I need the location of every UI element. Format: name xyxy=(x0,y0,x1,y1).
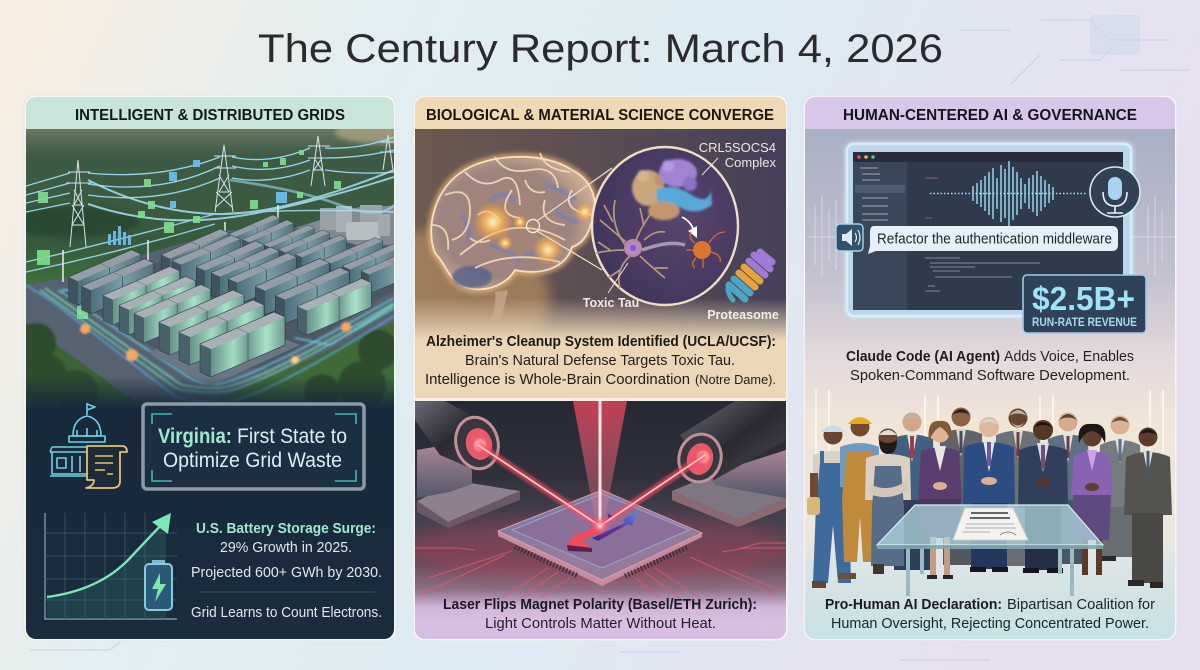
person: worker in overalls xyxy=(807,425,856,588)
header bar: HUMAN-CENTERED AI & GOVERNANCE xyxy=(843,107,1137,124)
right laser head xyxy=(672,401,786,527)
icon: battery xyxy=(145,560,172,610)
panel: intelligent and distributed grids xyxy=(24,94,396,642)
header bar xyxy=(26,97,394,129)
header bar xyxy=(805,97,1175,129)
text: laser flips magnet: Light Controls Matter Without Heat. xyxy=(485,615,716,632)
callout: revenue: $2.5B+ xyxy=(1032,280,1135,317)
labels: molecules: Proteasome xyxy=(707,308,779,322)
laser beams xyxy=(478,401,705,526)
text: Pro-Human AI Declaration: Bipartisan Coalition for xyxy=(1007,596,1155,613)
person: center man in navy suit xyxy=(963,417,1015,572)
person: man in dark navy suit xyxy=(1018,420,1068,573)
panel image: battery site landscape xyxy=(26,129,394,406)
left laser head xyxy=(415,401,520,528)
speech bubble xyxy=(868,226,1118,254)
laser image background xyxy=(410,398,790,640)
text: Claude Code: Claude Code (AI Agent) xyxy=(846,348,1000,365)
person: back row man 1 xyxy=(889,412,935,570)
wall columns xyxy=(815,390,1164,454)
declaration document xyxy=(953,508,1028,540)
person: back row man 4 xyxy=(1046,412,1090,564)
text: Pro-Human AI Declaration xyxy=(825,596,1155,632)
text: Alzheimer's finding: (Notre Dame). xyxy=(695,372,776,387)
text: laser flips magnet: Laser Flips Magnet Polarity (Basel/ETH Zurich): xyxy=(443,596,757,613)
icon: microphone xyxy=(1090,167,1140,217)
text: Claude Code: Spoken-Command Software Development. xyxy=(850,367,1130,384)
polarity arrows xyxy=(567,511,638,552)
microchip with traces xyxy=(415,490,786,598)
text: Alzheimer's finding xyxy=(425,333,776,388)
header bar: BIOLOGICAL & MATERIAL SCIENCE CONVERGE xyxy=(426,107,774,124)
person: man in gray suit xyxy=(1097,416,1143,561)
icon: capitol with scroll xyxy=(50,403,127,488)
text: laser flips magnet xyxy=(443,596,757,632)
icon: proteasome xyxy=(728,252,772,300)
callout: revenue: RUN-RATE REVENUE xyxy=(1032,315,1137,329)
magnified circle with molecules xyxy=(592,147,738,305)
labels: molecules xyxy=(583,140,779,322)
transmission pylons xyxy=(66,135,394,247)
callout: Virginia: First State to xyxy=(237,425,347,448)
brain image background xyxy=(415,129,786,398)
person: worker in orange overalls xyxy=(840,417,880,562)
text: Pro-Human AI Declaration: Pro-Human AI Declaration: xyxy=(825,596,1002,613)
battery container rows xyxy=(69,215,421,377)
header bar xyxy=(415,97,786,129)
text: Alzheimer's finding: Intelligence is Whole-Brain Coordination xyxy=(425,371,690,388)
text: battery storage stats: 29% Growth in 2025. xyxy=(220,539,352,556)
person: back row man 3 xyxy=(994,408,1042,566)
person: worker with beard xyxy=(865,428,911,574)
labels: molecules: Toxic Tau xyxy=(583,296,639,310)
icon: speaker xyxy=(836,224,863,251)
callout: revenue xyxy=(1023,275,1146,333)
voice waveform xyxy=(930,161,1087,226)
text: battery storage stats: Grid Learns to Count Electrons. xyxy=(191,604,382,621)
pads under containers xyxy=(148,340,300,386)
text: Alzheimer's finding: Brain's Natural Defense Targets Toxic Tau. xyxy=(465,352,735,369)
text: Alzheimer's finding: Alzheimer's Cleanup System Identified (UCLA/UCSF): xyxy=(426,333,776,350)
panel: human-centered AI and governance xyxy=(803,95,1177,641)
person: back row man 2 xyxy=(939,408,983,565)
text: Pro-Human AI Declaration: Human Oversight, Rejecting Concentrated Power. xyxy=(831,615,1149,632)
panel: biological and material science xyxy=(412,94,788,642)
energy lines around site xyxy=(26,285,394,402)
labels: molecules: CRL5SOCS4 xyxy=(699,140,776,155)
text: Claude Code: Adds Voice, Enables xyxy=(1004,348,1134,365)
person: front man in charcoal suit xyxy=(1124,428,1172,588)
text: Claude Code xyxy=(846,348,1134,384)
person: woman in lilac blazer xyxy=(1071,424,1113,575)
brain illustration xyxy=(431,153,612,322)
callout: Virginia: Optimize Grid Waste xyxy=(163,449,342,472)
text: battery storage stats: Projected 600+ GWh by 2030. xyxy=(191,564,382,581)
substation building xyxy=(296,205,394,246)
text: battery storage stats: U.S. Battery Storage Surge: xyxy=(196,520,376,537)
text: battery storage stats xyxy=(191,520,382,621)
labels: molecules: Complex xyxy=(725,155,776,170)
header bar: INTELLIGENT & DISTRIBUTED GRIDS xyxy=(75,107,345,124)
person: woman in purple blazer xyxy=(918,421,962,579)
glass table xyxy=(877,505,1103,596)
coalition group of people xyxy=(807,408,1172,588)
callout: Virginia xyxy=(143,404,364,489)
voice coding screen xyxy=(845,142,1133,318)
callout: Virginia: Virginia: xyxy=(158,425,232,448)
chart: battery storage growth curve xyxy=(45,513,177,619)
title: The Century Report: March 4, 2026 xyxy=(258,27,943,71)
speech bubble: Refactor the authentication middleware xyxy=(877,230,1112,248)
power lines and data nodes xyxy=(26,137,394,319)
decorative wave echoes xyxy=(808,195,1175,275)
